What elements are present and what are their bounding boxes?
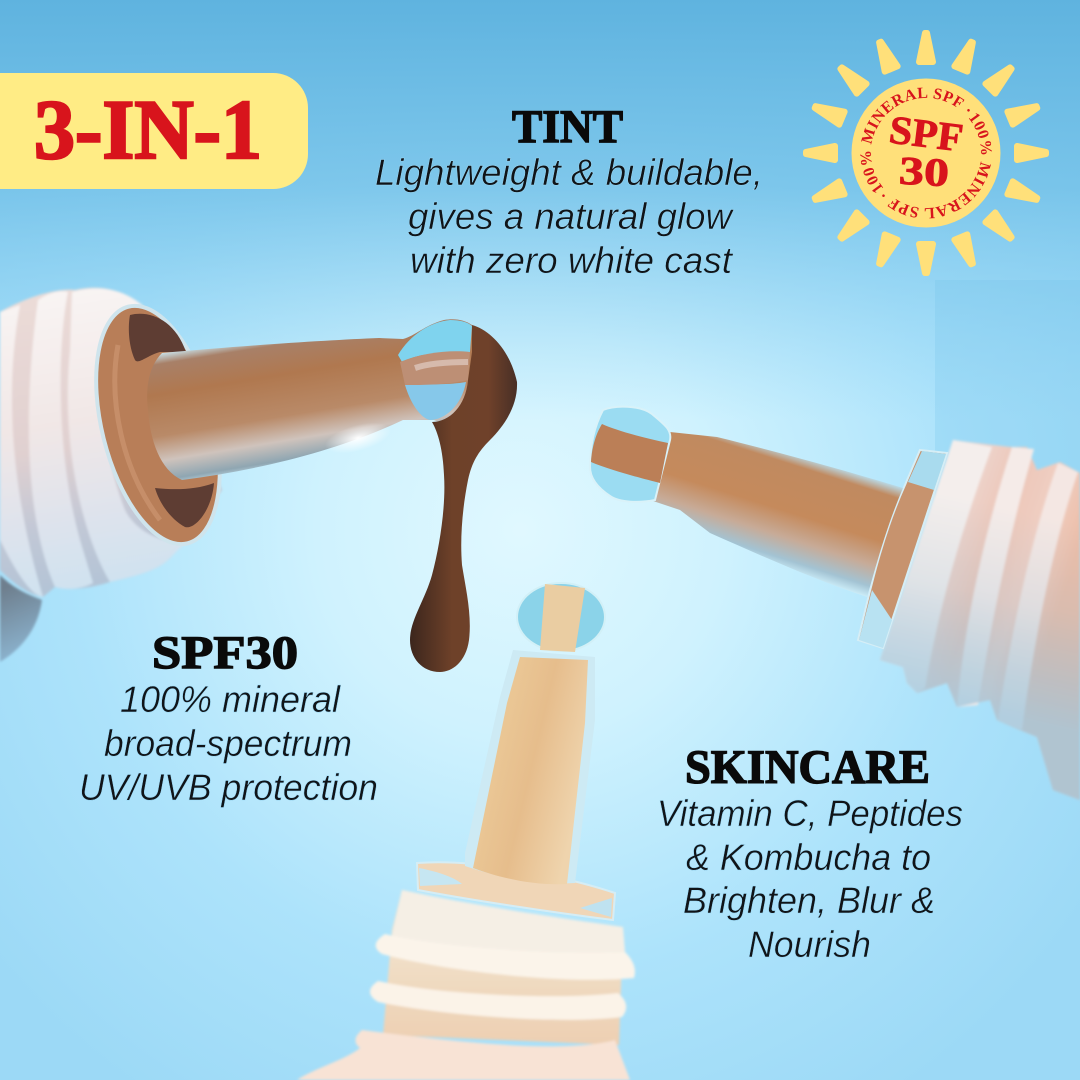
text block: TINT: gives a natural glow (408, 196, 734, 237)
text block: SPF30: SPF30 (152, 627, 298, 679)
left bottle tube (147, 319, 472, 480)
badge: 3-IN-1: 3-IN-1 (34, 83, 262, 177)
text block: SKINCARE: & Kombucha to (686, 837, 931, 878)
text block: SKINCARE: Brighten, Blur & (683, 880, 935, 921)
sparkle (322, 417, 394, 459)
text block: SPF30: UV/UVB protection (79, 767, 378, 808)
badge: 3-IN-1 (0, 73, 308, 189)
text block: TINT: with zero white cast (410, 240, 734, 281)
left bottle ribbed cap (0, 288, 222, 662)
text block: TINT: TINT (512, 101, 623, 153)
text block: TINT: Lightweight & buildable, (375, 152, 763, 193)
bottom bottle glass bulb (517, 583, 605, 652)
circular seal text: 100% MINERAL SPF · (860, 88, 970, 193)
bottle: left tint applicator with drip (0, 288, 517, 672)
right bottle ribbed cap (880, 440, 1080, 800)
left bottle glass flange (74, 293, 242, 557)
right bottle glass flange (858, 450, 947, 648)
circular seal text: 100% MINERAL SPF · (882, 113, 992, 218)
icon: sun SPF 30 seal (803, 30, 1049, 276)
right bottle tube (650, 432, 903, 597)
bottom bottle ribbed cap (297, 890, 635, 1080)
text block: SKINCARE (657, 741, 963, 965)
text block: TINT (375, 101, 763, 281)
bottle: right applicator (590, 407, 1080, 800)
text block: SKINCARE: Nourish (748, 924, 871, 965)
sun disc (852, 78, 1000, 228)
text block: SPF30: broad-spectrum (104, 723, 352, 764)
left bottle glass bulb (398, 320, 472, 420)
seal center SPF 30: SPF (887, 107, 966, 160)
seal center SPF 30 (887, 107, 966, 195)
bottle: bottom applicator (297, 583, 635, 1080)
right bottle glass bulb (590, 407, 670, 502)
bottom bottle glass flange (417, 862, 615, 920)
text block: SKINCARE: SKINCARE (685, 741, 930, 794)
text block: SPF30 (79, 627, 378, 808)
seal center SPF 30: 30 (898, 148, 950, 195)
text block: SPF30: 100% mineral (120, 679, 342, 720)
bottom bottle tube (465, 650, 595, 884)
sun rays (806, 33, 1046, 273)
text block: SKINCARE: Vitamin C, Peptides (657, 793, 963, 834)
brown drip (410, 325, 517, 672)
